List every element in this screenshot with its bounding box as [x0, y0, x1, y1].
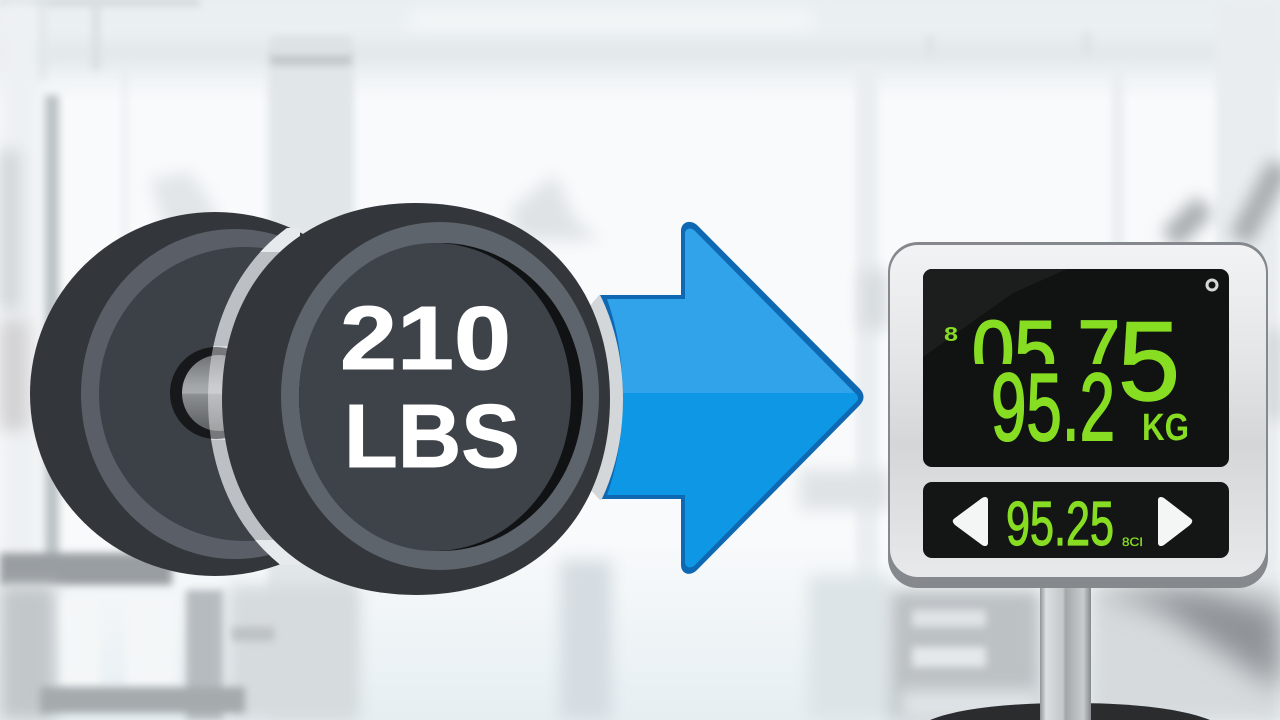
- main display: [923, 269, 1229, 467]
- pale rim ends: [255, 228, 300, 565]
- grey rim around front plate, left side: [211, 228, 287, 565]
- front weight plate: [222, 203, 610, 595]
- lower display: [923, 482, 1229, 559]
- main readout: 95.2: [991, 354, 1115, 461]
- weight label: 210: [340, 289, 511, 389]
- status indicator: [1207, 280, 1217, 290]
- dumbbell handle: [182, 355, 256, 431]
- scale housing: [888, 242, 1268, 588]
- icon: digital scale: [888, 242, 1268, 720]
- back weight plate: [30, 212, 400, 576]
- dumbbell handle socket: [170, 347, 262, 439]
- scale pole: [1040, 580, 1091, 720]
- grey rim, right side: [590, 294, 623, 500]
- weight label: [340, 289, 520, 487]
- icon: blue arrow: [600, 222, 864, 574]
- small unit mark: 8: [944, 324, 958, 346]
- right arrow button: [1158, 497, 1192, 546]
- left arrow button: [953, 497, 988, 546]
- weight label: LBS: [344, 387, 520, 487]
- icon: dumbbell: [30, 203, 610, 595]
- unit label: KG: [1142, 407, 1189, 449]
- lower readout: 95.25: [1006, 490, 1114, 559]
- main display: 5: [1118, 299, 1180, 424]
- small lower label: 8CI: [1122, 535, 1143, 549]
- rim highlight over handle: [208, 346, 228, 440]
- top readout: 05 7: [972, 304, 1120, 399]
- scale base: [930, 703, 1210, 720]
